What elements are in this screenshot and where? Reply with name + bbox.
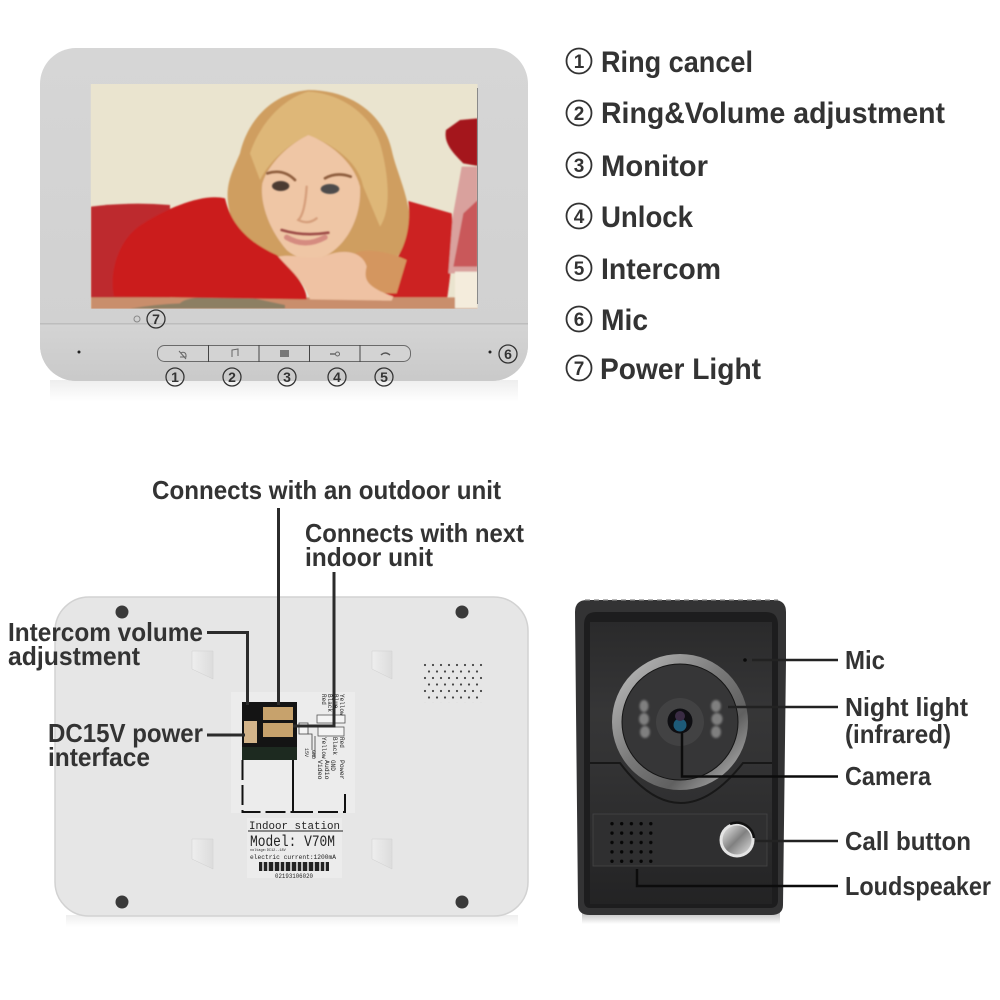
item 2: 2 — [574, 104, 584, 125]
callout: connects with next indoor unit: Connects with next — [305, 518, 524, 548]
callout: connects with outdoor unit: Connects with an outdoor unit — [152, 475, 501, 505]
circuit board area: Black — [331, 737, 338, 755]
model label — [247, 818, 343, 880]
callout: night light: Night light — [845, 692, 968, 722]
camera ring — [612, 654, 748, 790]
model label: electric current:1200mA — [250, 854, 336, 861]
circuit board area — [231, 692, 355, 813]
mounting slots — [192, 651, 392, 869]
circuit board area: Audio — [323, 760, 330, 780]
callout: DC15V power interface — [48, 718, 245, 772]
item 7: Power Light — [600, 353, 761, 386]
monitor back panel — [55, 597, 528, 927]
circuit board area: Red — [320, 694, 327, 705]
item 4: Unlock — [601, 201, 693, 234]
item 4 — [566, 201, 693, 234]
model label: Model: V70M — [250, 833, 335, 851]
model label: Indoor station — [249, 821, 340, 833]
callout: night light: (infrared) — [845, 719, 951, 749]
item 5: Intercom — [601, 253, 721, 286]
item 1: Ring cancel — [601, 46, 753, 79]
model label: voltage:DC12--18V — [250, 848, 287, 853]
button numbers: 5 — [380, 369, 388, 385]
camera lens — [668, 708, 692, 734]
button numbers — [166, 368, 393, 386]
circuit board area: Red — [338, 737, 345, 748]
item 7: 7 — [574, 359, 584, 380]
speaker panel — [593, 814, 767, 866]
item 1: 1 — [574, 52, 585, 73]
callout: intercom volume adjustment: Intercom volume — [8, 617, 203, 647]
mic hole — [78, 350, 80, 354]
item 2: Ring&Volume adjustment — [601, 97, 945, 130]
button numbers: 1 — [171, 369, 179, 385]
circuit board area: GND — [329, 760, 336, 771]
callout: DC15V power interface: DC15V power — [48, 718, 203, 748]
circuit board area: Yellow — [338, 694, 345, 716]
callout: camera — [682, 732, 931, 791]
item 3: Monitor — [601, 150, 708, 183]
circuit board area: Black — [326, 694, 333, 712]
power light: 7 — [152, 311, 160, 327]
outdoor camera door unit — [575, 600, 786, 924]
model label: 02193106020 — [275, 873, 313, 880]
circuit board area: Blue — [332, 694, 339, 709]
function list — [566, 46, 945, 386]
mic hole — [743, 658, 747, 662]
item 5: 5 — [574, 259, 585, 280]
callout: mic — [752, 645, 885, 675]
speaker grille — [423, 662, 483, 703]
call button — [720, 822, 754, 858]
monitor screen photo — [91, 84, 478, 310]
callout: connects with next indoor unit — [293, 518, 524, 726]
callout: connects with next indoor unit: indoor unit — [305, 542, 433, 572]
item 4: 4 — [574, 207, 585, 228]
circuit board area: GND — [310, 750, 316, 759]
item 3: 3 — [574, 156, 584, 177]
power light — [134, 310, 165, 328]
item 6: 6 — [574, 310, 584, 331]
button strip — [158, 345, 410, 362]
callout: call button: Call button — [845, 826, 971, 856]
callout: DC15V power interface: interface — [48, 742, 150, 772]
right hole with number 6: 6 — [504, 346, 512, 362]
button numbers: 2 — [228, 369, 236, 385]
item 6 — [566, 304, 648, 337]
callout: intercom volume adjustment: adjustment — [8, 641, 140, 671]
button numbers: 4 — [333, 369, 341, 385]
callout: loudspeaker — [637, 869, 991, 901]
circuit board area: 15V — [303, 748, 309, 757]
screws — [116, 606, 468, 908]
circuit board area: Power — [338, 760, 345, 780]
infrared lights — [639, 700, 722, 738]
item 6: Mic — [601, 304, 648, 337]
callout: night light — [728, 692, 968, 749]
callout: camera: Camera — [845, 761, 931, 791]
button numbers: 3 — [283, 369, 291, 385]
circuit board area: Yellow — [320, 737, 327, 759]
monitor front panel — [40, 48, 528, 402]
right hole with number 6 — [488, 345, 517, 363]
callout: intercom volume adjustment — [8, 617, 248, 705]
callout: mic: Mic — [845, 645, 885, 675]
circuit board area: Video — [316, 760, 323, 780]
